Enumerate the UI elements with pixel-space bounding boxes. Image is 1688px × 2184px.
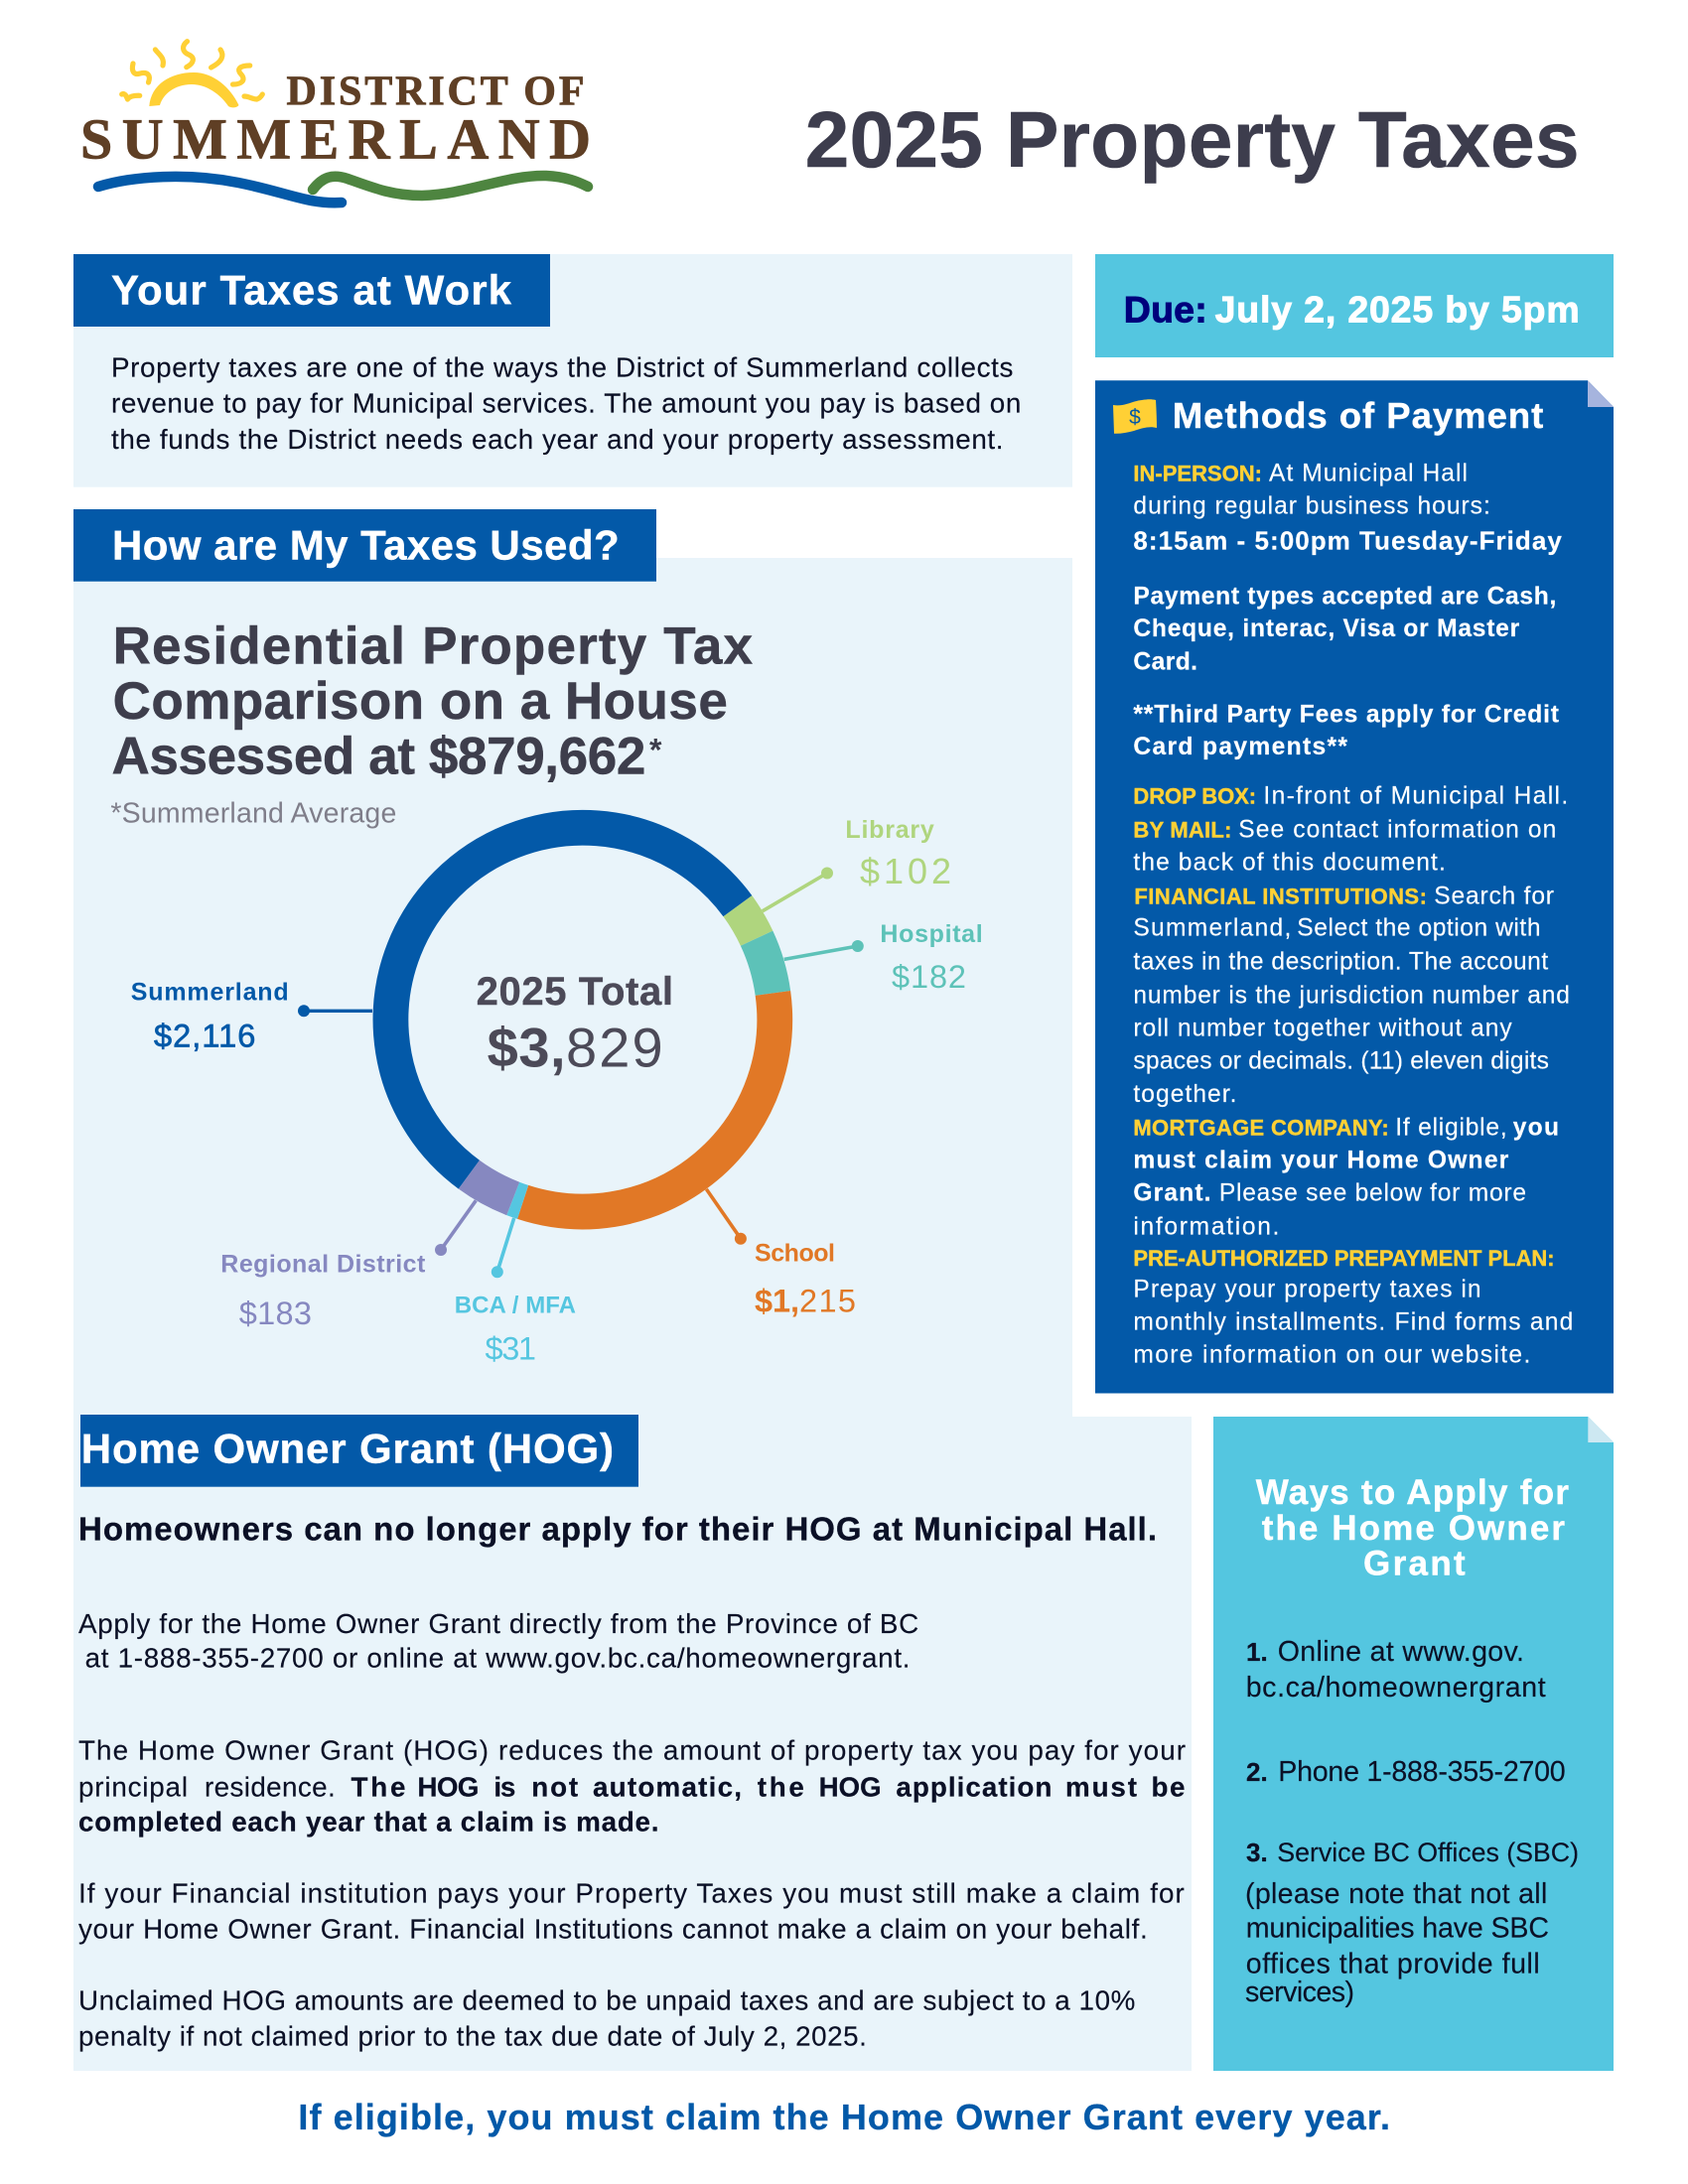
text: mortgage company: must claim your Home Owner [1133, 1148, 1509, 1174]
callout: library [763, 816, 951, 911]
text: what the grant does: completed each year that a claim is made. [78, 1807, 659, 1838]
text: third party fees [1133, 701, 1559, 760]
text: penalty [78, 1984, 1135, 2052]
callout: regional district: $183 [239, 1296, 312, 1331]
text: third party fees: **Third Party Fees apply for Credit [1133, 701, 1559, 728]
heading: how are my taxes used [73, 509, 656, 582]
panel: your taxes at work [73, 254, 1072, 487]
text: pre-authorized prepayment plan: PRE-AUTHORIZED PREPAYMENT PLAN: [1133, 1246, 1555, 1271]
text: payment types: Payment types accepted are Cash, [1133, 583, 1556, 610]
text: payment types: Card. [1133, 648, 1197, 675]
text: financial institutions: number is the jurisdiction number and [1133, 983, 1570, 1010]
chart title: * [649, 732, 662, 767]
item: service bc: services) [1245, 1977, 1354, 2008]
text: what the grant does [78, 1735, 1186, 1838]
text: financial institutions: Search for [1434, 884, 1554, 910]
heading: how are my taxes used: How are My Taxes Used? [112, 521, 620, 568]
text: mortgage company: you [1513, 1114, 1559, 1141]
panel: home owner grant [73, 1415, 1192, 2071]
callout: bca / mfa [455, 1218, 576, 1366]
callout: regional district: Regional District [220, 1251, 426, 1279]
notice: no longer apply at municipal hall: Homeowners can no longer apply for their HOG at Municipal Hall. [78, 1511, 1157, 1548]
logo wave: green [313, 176, 588, 196]
callout: hospital: Hospital [880, 920, 983, 948]
text: financial institutions: FINANCIAL INSTITUTIONS: [1134, 885, 1427, 909]
text: mortgage company: Grant. [1133, 1179, 1211, 1206]
donut centre total: 2025 Total [477, 970, 673, 1014]
text: penalty: Unclaimed HOG amounts are deemed to be unpaid taxes and are subject to a 10% [78, 1984, 1135, 2015]
donut centre total: $3, [488, 1017, 566, 1079]
text: in-person [1133, 460, 1562, 555]
text: pre-authorized prepayment plan: monthly installments. Find forms and [1133, 1308, 1573, 1335]
heading: your taxes at work: Your Taxes at Work [111, 267, 512, 314]
item: online [1246, 1636, 1546, 1704]
callout: library: Library [845, 816, 934, 844]
text: mortgage company: Please see below for more [1219, 1179, 1526, 1206]
text: financial institutions: together. [1133, 1081, 1237, 1108]
text: apply directly: at 1-888-355-2700 or online at www.gov.bc.ca/homeownergrant. [85, 1642, 911, 1673]
panel: due date [1095, 254, 1614, 357]
callout: school: School [755, 1240, 835, 1268]
item: service bc [1245, 1838, 1579, 2008]
callout: hospital [784, 920, 983, 995]
donut centre total [477, 970, 673, 1079]
chart title: Comparison on a House [113, 672, 728, 731]
icon: money: $ [1129, 406, 1141, 429]
text: drop box: DROP BOX: [1133, 783, 1256, 808]
item: service bc: Service BC Offices (SBC) [1277, 1838, 1579, 1867]
donut centre total: 829 [566, 1017, 663, 1079]
callout: bca / mfa: $31 [485, 1330, 536, 1366]
text: pre-authorized prepayment plan: Prepay your property taxes in [1133, 1277, 1481, 1303]
text: what the grant does: is [493, 1771, 515, 1802]
text: mortgage company: If eligible, [1395, 1114, 1507, 1141]
text: by mail [1133, 816, 1556, 877]
callout: school [706, 1189, 856, 1318]
text: what the grant does: application [896, 1771, 1052, 1802]
text: what the grant does: principal [78, 1771, 188, 1802]
text block: intro [111, 351, 1021, 455]
text: in-person: 8:15am - 5:00pm Tuesday-Friday [1133, 525, 1562, 555]
heading: methods of payment: Methods of Payment [1173, 395, 1543, 436]
item: online: Online at www.gov. [1278, 1636, 1524, 1668]
text: in-person: At Municipal Hall [1269, 460, 1468, 486]
text: financial institutions claim: your Home Owner Grant. Financial Institutions cannot make a claim on your behalf. [78, 1913, 1148, 1944]
text: what the grant does: the [758, 1771, 804, 1802]
item: service bc: offices that provide full [1246, 1949, 1540, 1980]
text: what the grant does: The [352, 1771, 405, 1802]
callout: summerland [131, 978, 372, 1053]
chart title: Residential Property Tax [113, 616, 754, 675]
text: by mail: BY MAIL: [1133, 817, 1231, 842]
logo: District of Summerland [80, 42, 591, 203]
title: 2025 Property Taxes [805, 95, 1579, 184]
footer callout: If eligible, you must claim the Home Owner Grant every year. [298, 2097, 1390, 2137]
text: by mail: See contact information on [1238, 816, 1556, 843]
callout: school: $1, [755, 1283, 799, 1318]
item: phone: 2. [1246, 1757, 1268, 1787]
text: penalty: penalty if not claimed prior to the tax due date of July 2, 2025. [78, 2021, 867, 2052]
donut chart [390, 828, 774, 1211]
text block: intro: the funds the District needs each year and your property assessment. [111, 424, 1003, 455]
callout: summerland: $2,116 [154, 1018, 255, 1053]
text: financial institutions: Select the option with [1297, 915, 1541, 942]
item: phone: Phone 1-888-355-2700 [1278, 1756, 1566, 1788]
text: what the grant does: HOG [819, 1771, 882, 1802]
text: in-person: during regular business hours: [1133, 492, 1490, 519]
text block: intro: revenue to pay for Municipal services. The amount you pay is based on [111, 387, 1021, 418]
text: financial institutions: taxes in the description. The account [1133, 949, 1548, 976]
item: service bc: municipalities have SBC [1246, 1913, 1549, 1945]
text: what the grant does: must [1065, 1771, 1137, 1802]
footnote: summerland average: *Summerland Average [110, 797, 396, 829]
logo text: District of: DISTRICT OF [286, 69, 584, 115]
text: financial institutions [1133, 884, 1570, 1108]
text block: intro: Property taxes are one of the ways the District of Summerland collects [111, 351, 1013, 382]
text: what the grant does: The Home Owner Grant (HOG) reduces the amount of property tax you pay for your [78, 1735, 1186, 1766]
text: what the grant does: not [531, 1771, 578, 1802]
text: financial institutions: Summerland, [1133, 915, 1291, 942]
callout: bca / mfa: BCA / MFA [455, 1293, 576, 1319]
panel: due date: July 2, 2025 by 5pm [1215, 288, 1580, 330]
text: by mail: the back of this document. [1133, 850, 1446, 877]
text: financial institutions: roll number together without any [1133, 1015, 1512, 1041]
panel: how are my taxes used [73, 509, 1072, 1418]
item: service bc: (please note that not all [1245, 1878, 1547, 1910]
page fold corner [1588, 380, 1614, 407]
chart title [111, 616, 754, 785]
text: pre-authorized prepayment plan: more information on our website. [1133, 1341, 1530, 1368]
heading: ways to apply: Grant [1363, 1545, 1466, 1582]
text: what the grant does: automatic, [593, 1771, 742, 1802]
text: what the grant does: residence. [205, 1771, 336, 1802]
callout: school: 215 [799, 1283, 856, 1318]
heading: ways to apply: the Home Owner [1262, 1509, 1565, 1548]
panel: methods of payment [1095, 380, 1614, 1394]
text: mortgage company [1133, 1114, 1559, 1240]
item: online: bc.ca/homeownergrant [1246, 1672, 1546, 1704]
heading: home owner grant [80, 1415, 638, 1487]
callout: library: $102 [860, 851, 951, 891]
callout: summerland: Summerland [131, 978, 289, 1006]
item: online: 1. [1246, 1637, 1268, 1667]
text: apply directly: Apply for the Home Owner Grant directly from the Province of BC [78, 1608, 918, 1639]
text: in-person: IN-PERSON: [1133, 461, 1262, 485]
text: mortgage company: MORTGAGE COMPANY: [1133, 1115, 1389, 1140]
page fold corner [1588, 1417, 1614, 1442]
text: pre-authorized prepayment plan [1133, 1246, 1573, 1368]
text: drop box: In-front of Municipal Hall. [1263, 782, 1568, 809]
heading: home owner grant: Home Owner Grant (HOG) [81, 1425, 614, 1471]
panel: due date: Due: [1124, 288, 1207, 330]
text: apply directly [78, 1608, 918, 1673]
heading: ways to apply [1256, 1473, 1569, 1582]
icon: sun [122, 42, 262, 107]
item: service bc: 3. [1246, 1838, 1268, 1867]
text: financial institutions claim: If your Financial institution pays your Property Taxes you must still make a claim for [78, 1878, 1185, 1909]
chart title: Assessed at $879,662 [111, 727, 645, 785]
heading: your taxes at work [73, 254, 550, 327]
panel: ways to apply [1213, 1417, 1614, 2071]
text: financial institutions: spaces or decimals. (11) eleven digits [1133, 1048, 1549, 1075]
callout: regional district [220, 1200, 476, 1331]
heading: ways to apply: Ways to Apply for [1256, 1473, 1569, 1512]
text: what the grant does: HOG [417, 1771, 479, 1802]
text: payment types: Cheque, interac, Visa or Master [1133, 615, 1520, 642]
logo text: Summerland: SUMMERLAND [80, 106, 591, 171]
text: third party fees: Card payments** [1133, 734, 1347, 760]
text: financial institutions claim [78, 1878, 1185, 1944]
text: mortgage company: information. [1133, 1213, 1279, 1240]
callout: hospital: $182 [892, 959, 966, 995]
logo wave: blue [98, 177, 342, 203]
icon: money [1113, 399, 1157, 434]
text: payment types [1133, 583, 1556, 675]
text: what the grant does: be [1152, 1771, 1186, 1802]
